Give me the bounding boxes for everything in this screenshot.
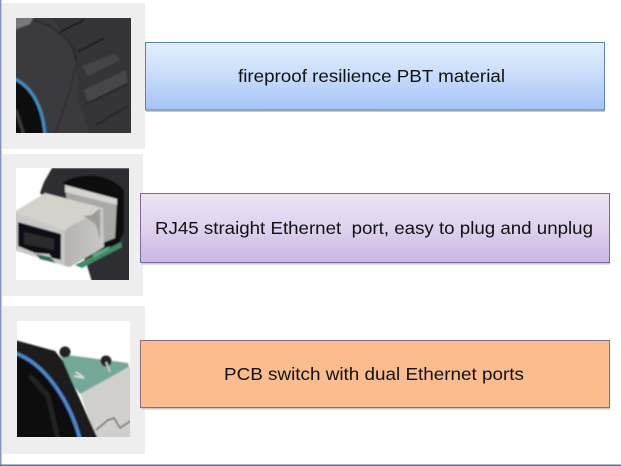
callout text: fireproof resilience PBT material — [238, 66, 505, 86]
callout: PCB switch — [140, 340, 610, 410]
callout: fireproof material — [146, 42, 605, 112]
photo: RJ45 jack on connector — [14, 168, 131, 282]
callout: RJ45 port — [140, 194, 610, 264]
panel: RJ45 port photo — [2, 154, 143, 296]
callout text: RJ45 straight Ethernet port, easy to plug and unplug — [155, 218, 593, 238]
callout text: PCB switch with dual Ethernet ports — [224, 364, 524, 384]
photo: PCB with blue ring connector — [15, 321, 132, 439]
panel: PBT material photo — [2, 3, 145, 149]
panel: PCB switch photo — [2, 306, 145, 454]
photo: black connector housing with blue ring — [14, 16, 133, 135]
